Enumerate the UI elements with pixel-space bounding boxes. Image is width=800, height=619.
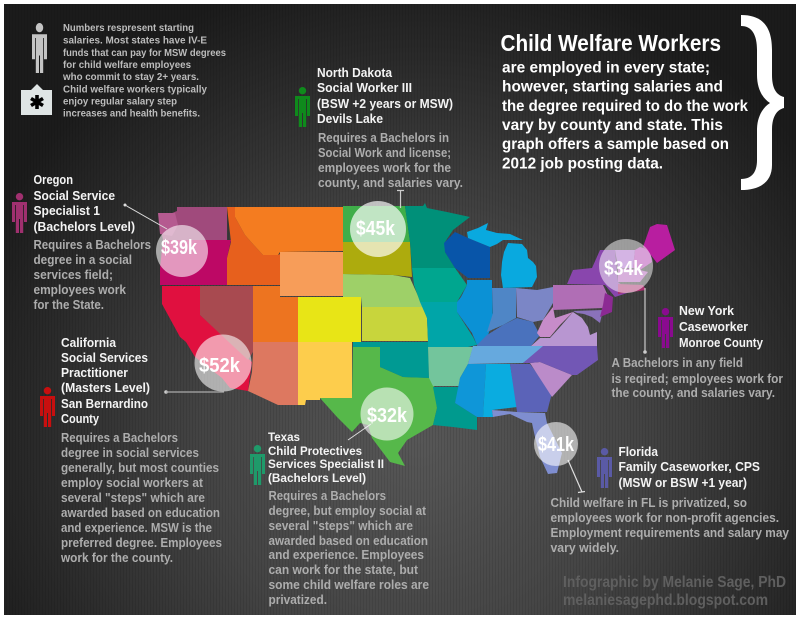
state: South Dakota [343, 242, 412, 277]
Oregon heading: Social Service [34, 188, 115, 203]
California heading: (Masters Level) [61, 380, 150, 395]
state: Texas [320, 347, 437, 466]
New York description: is reqired; employees work for [612, 372, 783, 386]
state: Nebraska [343, 274, 423, 307]
state: Pennsylvania [553, 285, 610, 310]
New York heading: Caseworker [679, 319, 748, 334]
California heading: Social Services [61, 350, 148, 365]
Texas heading: Texas [268, 430, 300, 444]
Florida description: employees work for non-profit agencies. [550, 511, 779, 525]
intro text: 2012 job posting data. [502, 155, 663, 172]
California description: and experience. MSW is the [61, 521, 212, 535]
legend text [62, 22, 226, 120]
Oregon heading: (Bachelors Level) [34, 219, 135, 234]
North Dakota heading: Devils Lake [317, 111, 383, 126]
state: Utah [253, 286, 298, 342]
state: Nevada [200, 286, 253, 360]
state: Virginia [531, 312, 597, 346]
leader line [164, 390, 224, 394]
intro text: are employed in every state; [502, 59, 710, 76]
Texas description: several "steps" which are [268, 519, 413, 533]
California heading: San Bernardino [61, 396, 148, 411]
state: North Carolina [523, 346, 598, 375]
salary bubble: California [194, 334, 252, 392]
Texas heading: Services Specialist II [268, 457, 384, 471]
intro text: the degree required to do the work [502, 98, 748, 115]
panel: Florida [550, 444, 789, 555]
intro text: however, starting salaries and [502, 79, 723, 96]
legend text: funds that can pay for MSW degrees [63, 47, 226, 59]
state: Wisconsin [444, 232, 490, 278]
California description: work for the county. [60, 551, 173, 565]
North Dakota description [318, 131, 463, 190]
icon: green person [295, 87, 310, 127]
California description: several "steps" which are [61, 491, 205, 505]
salary bubble: Oregon: $39k [161, 237, 198, 259]
California description: Requires a Bachelors [61, 431, 178, 445]
North Dakota heading: (BSW +2 years or MSW) [317, 96, 453, 111]
state: West Virginia [537, 307, 573, 337]
Texas description: privatized. [268, 593, 327, 607]
state: Idaho [227, 207, 280, 285]
legend text: salaries. Most states have IV-E [63, 35, 207, 47]
state: South Carolina [530, 362, 572, 397]
Texas description: can work for the state, but [268, 563, 419, 577]
California description: awarded based on education [61, 506, 220, 520]
Oregon description: services field; [34, 268, 113, 282]
Oregon heading: Specialist 1 [34, 203, 100, 218]
state: Tennessee [468, 346, 545, 364]
state: Missouri [420, 302, 477, 347]
state: Kentucky [477, 318, 540, 346]
New York heading: Monroe County [679, 335, 764, 350]
Oregon description: Requires a Bachelors [34, 238, 151, 252]
map: United States by state [158, 203, 675, 474]
state: New Jersey [600, 293, 613, 317]
California description: degree in social services [61, 446, 199, 460]
California heading [61, 335, 150, 426]
credit: melaniesagephd.blogspot.com [563, 592, 768, 609]
North Dakota heading [317, 65, 453, 126]
state: Iowa [412, 268, 467, 302]
leader line [124, 204, 167, 229]
Texas description: Requires a Bachelors [268, 489, 386, 503]
salary bubble: North Dakota [350, 201, 406, 257]
salary bubble: California: $52k [199, 355, 241, 377]
Texas description: some child welfare roles are [268, 578, 429, 592]
New York heading: New York [679, 303, 735, 318]
state: Arizona [248, 342, 298, 405]
Texas description: awarded based on education [268, 534, 428, 548]
state: New Hampshire [633, 247, 652, 270]
state: Michigan lower [501, 243, 537, 288]
legend text: Numbers respresent starting [63, 22, 194, 34]
state: Florida [492, 410, 562, 474]
legend text: Child welfare workers typically [63, 83, 207, 95]
icon: right curly brace [741, 15, 784, 190]
state: New Mexico [298, 342, 352, 405]
state: Georgia [510, 364, 552, 412]
North Dakota description: employees work for the [318, 161, 451, 175]
state: Massachusetts [618, 268, 648, 282]
salary bubble: Texas [360, 388, 414, 440]
state: California [162, 286, 252, 391]
icon: magenta person [12, 193, 27, 233]
salary bubble: Florida [534, 422, 578, 466]
Florida description [550, 496, 789, 555]
icon: asterisk box [21, 84, 52, 115]
title block [500, 30, 748, 172]
Texas description: degree, but employ social at [268, 504, 427, 518]
Oregon description: employees work [34, 283, 126, 297]
Texas heading [268, 430, 384, 485]
state: Vermont [615, 250, 635, 268]
state: New York [567, 250, 630, 297]
leader line [348, 424, 371, 440]
state: Maine [643, 224, 675, 263]
state: Arkansas [428, 347, 473, 386]
New York heading [679, 303, 764, 350]
state: North Dakota [343, 206, 410, 242]
salary bubble: New York: $34k [604, 258, 644, 280]
North Dakota heading: Social Worker III [317, 80, 412, 95]
salary bubble: North Dakota: $45k [356, 218, 396, 240]
salary bubble: Florida: $41k [538, 434, 575, 456]
icon: purple person [658, 308, 673, 348]
North Dakota description: Requires a Bachelors in [318, 131, 449, 145]
state: Illinois [457, 280, 493, 345]
icon: person [32, 23, 47, 73]
intro text: vary by county and state. This [502, 117, 723, 134]
Florida description: Employment requirements and salary may [550, 526, 789, 540]
state: Montana [235, 207, 343, 255]
Texas heading: Child Protectives [268, 444, 362, 458]
panel: Texas [250, 424, 429, 607]
Texas description: and experience. Employees [268, 548, 424, 562]
panel: Oregon [12, 172, 167, 312]
panel: New York [612, 288, 783, 400]
Oregon description: degree in a social [34, 253, 132, 267]
Texas description [268, 489, 429, 607]
legend text: for child welfare employees [63, 59, 191, 71]
Oregon description: for the State. [34, 298, 104, 312]
state: Ohio [516, 287, 553, 322]
state: Colorado [298, 297, 361, 342]
legend text: enjoy regular salary step [63, 95, 177, 107]
intro text: graph offers a sample based on [502, 136, 729, 153]
icon: red person [40, 387, 55, 427]
California description: generally, but most counties [61, 461, 219, 475]
state: Mississippi [455, 364, 486, 417]
Florida heading [618, 444, 760, 490]
state: Kansas [362, 307, 428, 341]
North Dakota description: county, and salaries vary. [318, 176, 463, 190]
Oregon heading: Oregon [34, 172, 73, 187]
salary bubble: New York [599, 239, 653, 293]
salary bubble: Oregon [156, 225, 208, 277]
panel: North Dakota [295, 65, 463, 208]
heading: Child Welfare Workers [500, 30, 721, 56]
icon: indigo person [597, 448, 612, 488]
Florida heading: Florida [618, 444, 659, 459]
state: Puget Sound area [158, 213, 178, 236]
California heading: California [61, 335, 117, 350]
California description: employ social workers at [61, 476, 204, 490]
state: Indiana [487, 288, 516, 332]
North Dakota heading: North Dakota [317, 65, 393, 80]
salary bubble: Texas: $32k [367, 405, 408, 427]
state: Louisiana [433, 387, 477, 430]
icon: teal-green person [250, 445, 265, 485]
state: Minnesota [405, 203, 470, 268]
leader line [643, 288, 647, 354]
California description: preferred degree. Employees [61, 536, 222, 550]
leader line [397, 190, 404, 208]
New York description [612, 356, 783, 400]
legend text: who commit to stay 2+ years. [62, 71, 199, 83]
state: Michigan upper [467, 223, 523, 247]
Florida description: vary widely. [550, 541, 619, 555]
New York description: the county, and salaries vary. [612, 386, 775, 400]
Oregon heading [34, 172, 135, 234]
Texas heading: (Bachelors Level) [268, 471, 366, 485]
intro text [502, 59, 748, 172]
legend: person and asterisk icons with note [21, 22, 226, 120]
North Dakota description: Social Work and license; [318, 146, 451, 160]
Florida description: Child welfare in FL is privatized, so [550, 496, 747, 510]
California heading: County [61, 411, 100, 426]
state: Oklahoma [353, 342, 429, 378]
state: Maryland and Delaware [573, 310, 603, 323]
state: Alabama [483, 364, 517, 417]
New York description: A Bachelors in any field [612, 356, 743, 370]
panel: California [40, 335, 224, 565]
state: Washington [159, 207, 227, 240]
California heading: Practitioner [61, 365, 128, 380]
Florida heading: (MSW or BSW +1 year) [618, 475, 747, 490]
state: Oregon [160, 240, 231, 285]
California description [60, 431, 222, 565]
state: Connecticut and Rhode Island [618, 284, 646, 294]
leader line [568, 460, 585, 492]
credit [563, 574, 786, 609]
state: Wyoming [280, 252, 343, 296]
Oregon description [34, 238, 151, 312]
legend text: increases and health benefits. [63, 108, 200, 120]
Florida heading: Family Caseworker, CPS [618, 459, 760, 474]
